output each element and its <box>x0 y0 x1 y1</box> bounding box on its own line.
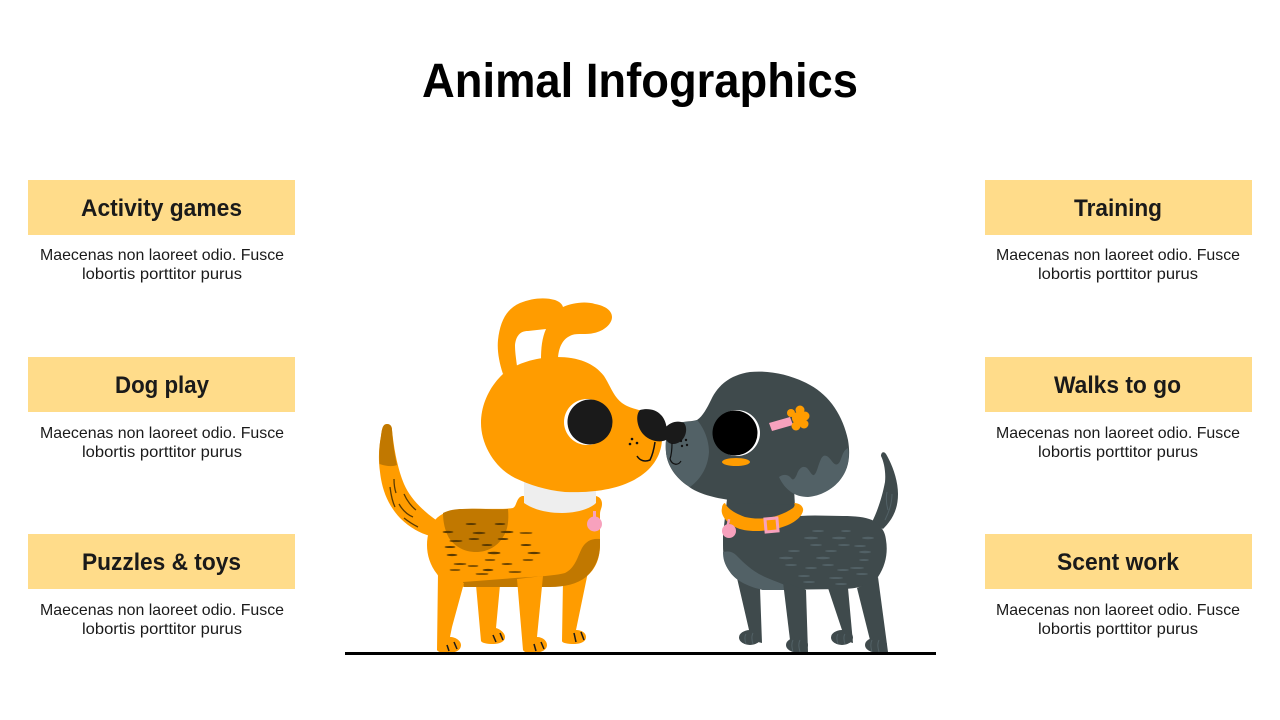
panel: training <box>985 180 1252 283</box>
panel: scent work: Scent work <box>1057 549 1180 576</box>
panel: puzzles and toys: Puzzles & toys <box>82 549 241 576</box>
tail <box>872 452 898 529</box>
fur marks <box>442 523 540 575</box>
title: Animal Infographics <box>422 55 858 108</box>
body <box>427 496 602 587</box>
nose <box>637 409 667 441</box>
fur marks <box>779 530 874 585</box>
nose <box>664 422 686 444</box>
panel: activity games <box>28 180 295 283</box>
ear <box>498 298 612 374</box>
panel: activity games: Maecenas non laoreet odio. Fusce <box>40 247 284 264</box>
orange cheek <box>722 458 750 466</box>
panel: walks to go: Maecenas non laoreet odio. Fusce <box>996 425 1240 442</box>
panel: training: lobortis porttitor purus <box>1038 266 1198 283</box>
panel: puzzles and toys <box>28 534 295 638</box>
ground line <box>345 652 936 655</box>
panel: activity games: lobortis porttitor purus <box>82 266 242 283</box>
black dog illustration <box>664 372 898 652</box>
panel: training: Training <box>1074 195 1162 222</box>
panel: walks to go: Walks to go <box>1054 372 1181 399</box>
neck <box>723 488 796 535</box>
far legs <box>737 578 853 645</box>
pink tag <box>722 519 736 538</box>
white collar <box>524 480 596 513</box>
pink tag <box>587 511 602 532</box>
paw toes <box>745 633 879 652</box>
panel: dog play: Dog play <box>115 372 210 399</box>
flower <box>787 406 810 430</box>
panel: scent work: Maecenas non laoreet odio. Fusce <box>996 602 1240 619</box>
panel: walks to go <box>985 357 1252 461</box>
panel: dog play <box>28 357 295 461</box>
far legs <box>476 585 505 644</box>
orange dog illustration <box>379 298 667 653</box>
body <box>723 516 887 590</box>
toes <box>447 632 584 651</box>
near legs <box>783 577 888 652</box>
eye <box>712 410 760 456</box>
panel: dog play: Maecenas non laoreet odio. Fusce <box>40 425 284 442</box>
belly shading <box>723 551 786 590</box>
panel: activity games: Activity games <box>81 195 242 222</box>
whisker dots and mouth <box>670 439 688 464</box>
whisker dots and mouth <box>629 438 655 461</box>
head <box>481 357 662 492</box>
tail <box>379 424 436 536</box>
panel: puzzles and toys: lobortis porttitor purus <box>82 621 242 638</box>
panel: scent work <box>985 534 1252 638</box>
panel: scent work: lobortis porttitor purus <box>1038 621 1198 638</box>
chest shading <box>463 539 600 587</box>
panel: dog play: lobortis porttitor purus <box>82 444 242 461</box>
saddle patch <box>443 509 508 552</box>
panel: puzzles and toys: Maecenas non laoreet odio. Fusce <box>40 602 284 619</box>
collar <box>722 503 803 531</box>
panel: walks to go: lobortis porttitor purus <box>1038 444 1198 461</box>
collar buckle <box>765 518 778 532</box>
panel: training: Maecenas non laoreet odio. Fusce <box>996 247 1240 264</box>
head <box>666 372 849 505</box>
ear shading <box>779 448 849 497</box>
pink hair clip <box>769 417 793 431</box>
eye <box>564 399 612 445</box>
muzzle shading <box>666 420 709 487</box>
near legs <box>437 573 464 653</box>
